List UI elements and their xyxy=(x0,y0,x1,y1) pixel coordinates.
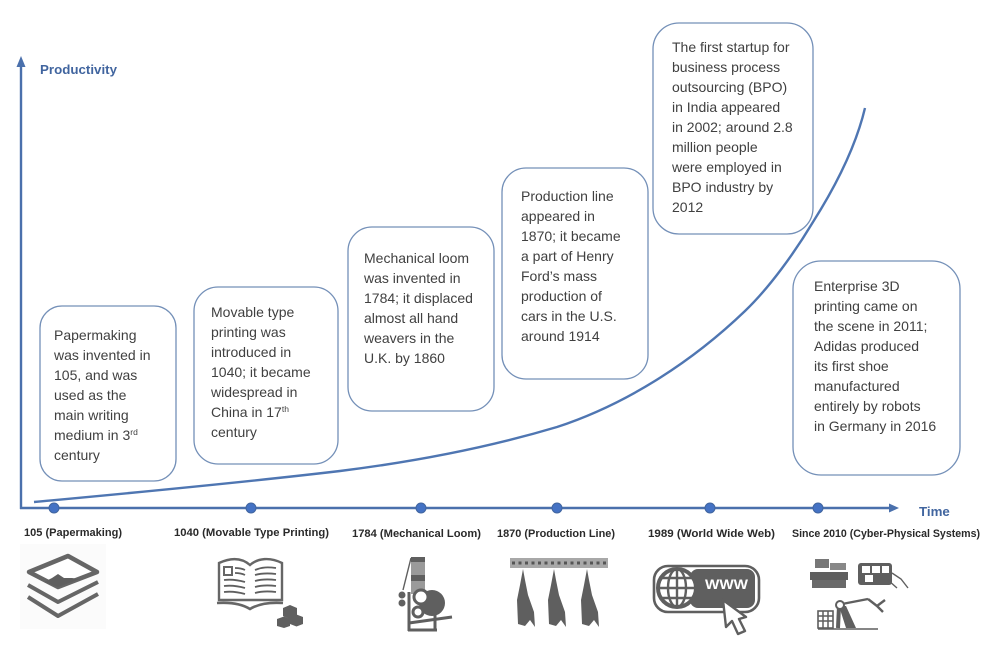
icon: world wide web xyxy=(654,566,759,634)
panel: 3D printing callout: its first shoe xyxy=(814,358,889,374)
icon: world wide web: WWW xyxy=(705,576,749,592)
panel: mechanical loom callout: was invented in xyxy=(363,270,461,286)
panel: BPO callout xyxy=(653,23,813,234)
panel: movable type callout xyxy=(194,287,338,464)
panel: papermaking callout: Papermaking xyxy=(54,327,136,343)
panel: BPO callout: The first startup for xyxy=(672,39,790,55)
panel: movable type callout: printing was xyxy=(211,324,286,340)
icon: paper stack xyxy=(20,544,106,629)
panel: production line callout: Production line xyxy=(521,188,614,204)
panel: 3D printing callout: entirely by robots xyxy=(814,398,921,414)
panel: mechanical loom callout: 1784; it displaced xyxy=(364,290,473,306)
icon: production line xyxy=(510,558,608,627)
panel: BPO callout: outsourcing (BPO) xyxy=(672,79,787,95)
panel: papermaking callout xyxy=(40,306,176,481)
panel: papermaking callout: rd xyxy=(130,427,138,437)
panel: production line callout: cars in the U.S. xyxy=(521,308,617,324)
icon: cyber-physical systems xyxy=(810,559,908,629)
panel: movable type callout: China in 17 xyxy=(211,404,282,420)
panel: papermaking callout: century xyxy=(54,447,100,463)
panel: 3D printing callout: the scene in 2011; xyxy=(814,318,927,334)
panel: BPO callout: million people xyxy=(672,139,758,155)
panel: production line callout: 1870; it became xyxy=(521,228,621,244)
panel: movable type callout: introduced in xyxy=(211,344,291,360)
icon: mechanical loom xyxy=(398,557,452,631)
label: 1870: 1870 (Production Line) xyxy=(497,528,615,540)
panel: BPO callout: in 2002; around 2.8 xyxy=(672,119,793,135)
panel: production line callout: a part of Henry xyxy=(521,248,614,264)
axis label: productivity: Productivity xyxy=(40,62,118,77)
panel: mechanical loom callout: weavers in the xyxy=(363,330,454,346)
timeline markers xyxy=(49,503,823,513)
panel: BPO callout: 2012 xyxy=(672,199,703,215)
panel: 3D printing callout: manufactured xyxy=(814,378,900,394)
label: 1040: 1040 (Movable Type Printing) xyxy=(174,527,329,539)
panel: mechanical loom callout: Mechanical loom xyxy=(364,250,469,266)
axis label: time: Time xyxy=(919,504,950,519)
panel: movable type callout: 1040; it became xyxy=(211,364,311,380)
panel: 3D printing callout: Enterprise 3D xyxy=(814,278,900,294)
panel: 3D printing callout: Adidas produced xyxy=(814,338,919,354)
panel: BPO callout: were employed in xyxy=(671,159,782,175)
panel: BPO callout: in India appeared xyxy=(672,99,780,115)
panel: mechanical loom callout: U.K. by 1860 xyxy=(364,350,445,366)
horizontal axis: time xyxy=(20,504,899,512)
icon: open book with type blocks xyxy=(217,559,303,628)
label: 1784: 1784 (Mechanical Loom) xyxy=(352,528,481,540)
panel: papermaking callout: medium in 3 xyxy=(54,427,130,443)
panel: papermaking callout: was invented in xyxy=(53,347,151,363)
panel: mechanical loom callout: almost all hand xyxy=(364,310,458,326)
growth curve xyxy=(34,108,865,502)
panel: 3D printing callout: printing came on xyxy=(814,298,918,314)
panel: production line callout xyxy=(502,168,648,379)
panel: production line callout: Ford’s mass xyxy=(521,268,597,284)
panel: movable type callout: Movable type xyxy=(211,304,294,320)
label: since 2010: Since 2010 (Cyber-Physical Systems) xyxy=(792,528,980,540)
panel: 3D printing callout xyxy=(793,261,960,475)
vertical axis: productivity xyxy=(16,56,26,509)
panel: 3D printing callout: in Germany in 2016 xyxy=(814,418,936,434)
panel: BPO callout: BPO industry by xyxy=(672,179,773,195)
panel: production line callout: around 1914 xyxy=(521,328,600,344)
panel: papermaking callout: used as the xyxy=(54,387,127,403)
panel: BPO callout: business process xyxy=(672,59,780,75)
panel: production line callout: production of xyxy=(521,288,602,304)
panel: production line callout: appeared in xyxy=(521,208,595,224)
label: 1989: 1989 (World Wide Web) xyxy=(648,528,775,540)
panel: papermaking callout: 105, and was xyxy=(54,367,137,383)
panel: mechanical loom callout xyxy=(348,227,494,411)
panel: papermaking callout: main writing xyxy=(54,407,129,423)
panel: movable type callout: widespread in xyxy=(210,384,297,400)
label: 105: 105 (Papermaking) xyxy=(24,527,122,539)
panel: movable type callout: th xyxy=(282,404,289,414)
panel: movable type callout: century xyxy=(211,424,257,440)
